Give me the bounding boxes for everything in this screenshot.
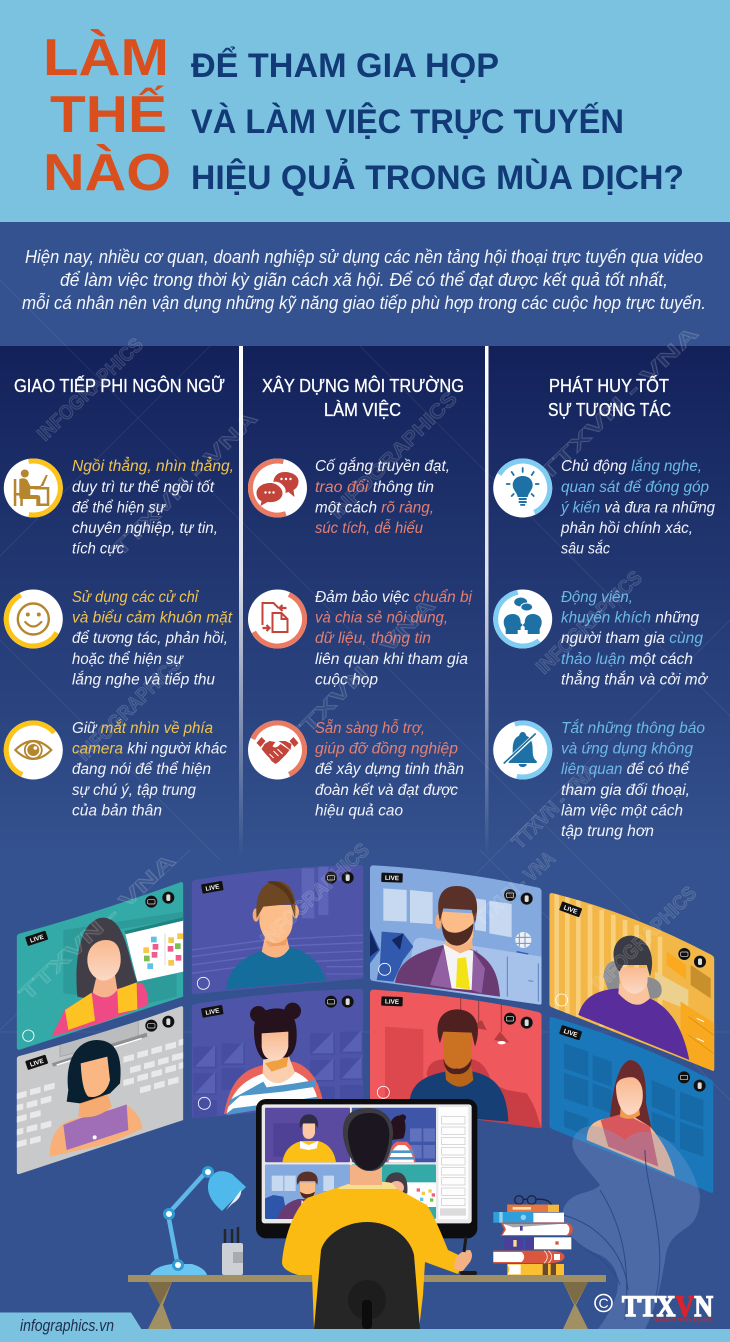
LIVE badge: LIVE (29, 1058, 45, 1069)
text block 1.1: chuyên nghiệp, tự tin, (72, 520, 218, 537)
text block 1.2: Sử dụng các cử chỉ (72, 589, 199, 606)
watermarks: TTXVN - VNA (508, 760, 601, 854)
text block 2.1: một cách rõ ràng, (315, 500, 434, 516)
intro text (22, 247, 706, 313)
text block 1.1: tích cực (72, 540, 124, 558)
text block 2.2: dữ liệu, thông tin (315, 630, 431, 647)
mini sidebar (438, 1107, 468, 1219)
mini screen purple (265, 1108, 350, 1162)
text block 2.2: và chia sẻ nội dung, (315, 610, 448, 626)
text block 3.3: Tắt những thông báo (561, 720, 705, 737)
website tag (0, 1312, 142, 1335)
text block 1.1: Ngồi thẳng, nhìn thẳng, (72, 457, 234, 475)
LIVE badge: LIVE (385, 998, 399, 1006)
hand and pen (454, 1250, 472, 1272)
text block 1.3: Giữ mắt nhìn về phía (72, 720, 213, 737)
text block 2.3 (315, 720, 464, 820)
watermarks: INFOGRAPHICS (73, 652, 186, 766)
text block 1.3: của bản thân (72, 802, 162, 820)
icon: chat bubbles (243, 454, 312, 522)
text block 2.3: hiệu quả cao (315, 802, 403, 820)
screen: teal woman (17, 882, 183, 1052)
text block 1.2 (72, 589, 233, 688)
LIVE badge (559, 901, 582, 917)
icon: person at desk (2, 457, 65, 519)
column 3: promoting interaction (485, 375, 715, 840)
TTXVN logo: C (598, 1295, 609, 1311)
text block 3.1: ý kiến và đưa ra những (560, 500, 715, 516)
bottom band (0, 1329, 730, 1342)
LIVE badge: LIVE (205, 1007, 220, 1017)
desk lamp (150, 1168, 246, 1275)
subtitle: VÀ LÀM VIỆC TRỰC TUYẾN (191, 103, 624, 141)
watermarks over screens: INFOGRAPHICS (588, 882, 701, 996)
text block 3.2: Động viên, (561, 589, 633, 606)
LIVE badge: LIVE (563, 904, 578, 916)
TTXVN logo: Vietnam News Agency (654, 1318, 714, 1324)
heading column 3 (548, 375, 671, 420)
watermarks (0, 280, 730, 1100)
text block 3.3: và ứng dụng không (561, 740, 693, 758)
intro text: để làm việc trong thời kỳ giãn cách xã hội. Để có thể đạt được kết quả tốt nhất, (60, 270, 668, 290)
text block 1.2: và biểu cảm khuôn mặt (72, 610, 233, 626)
text block 3.3: làm việc một cách (561, 802, 683, 820)
text block 3.1: sâu sắc (561, 540, 610, 558)
illustration: video call screens left (17, 865, 363, 1175)
watermarks: INFOGRAPHICS (33, 334, 148, 446)
title: LÀM THẾ NÀO: THẾ (50, 85, 167, 144)
column 2: building work environment (242, 375, 473, 820)
watermarks over screens (15, 839, 701, 1006)
text block 1.3: sự chú ý, tập trung (72, 782, 196, 799)
text block 3.1 (560, 458, 715, 558)
screen: person on yellow stripes (548, 892, 715, 1073)
column dividers (239, 346, 488, 856)
header band (0, 0, 730, 222)
screen: purple man (192, 865, 363, 997)
heading column 3: SỰ TƯƠNG TÁC (548, 400, 671, 420)
text block 3.2: khuyến khích những (561, 610, 699, 626)
heading column 1: GIAO TIẾP PHI NGÔN NGỮ (14, 375, 225, 396)
subtitle (191, 47, 684, 197)
text block 3.3: tập trung hơn (561, 823, 654, 840)
LIVE badge (25, 1055, 48, 1070)
text block 1.2: hoặc thể hiện sự (72, 651, 184, 668)
text block 1.1: để thể hiện sự (72, 500, 166, 516)
plant silhouette (562, 1126, 700, 1329)
heading column 2: LÀM VIỆC (324, 400, 401, 420)
watermarks over screens: TTXVN - VNA (471, 847, 560, 931)
title: LÀM THẾ NÀO: NÀO (43, 144, 171, 202)
text block 2.1: Cố gắng truyền đạt, (315, 458, 450, 475)
text block 2.3: Sẵn sàng hỗ trợ, (315, 720, 425, 737)
text block 2.1 (315, 458, 450, 537)
watermarks over screens: TTXVN - VNA (15, 850, 180, 1006)
text block 3.1: quan sát để đóng góp (561, 479, 709, 496)
controls (504, 889, 533, 905)
icon: light bulb (486, 451, 560, 525)
text block 3.1: phản hồi chính xác, (560, 520, 693, 537)
text block 3.2: thẳng thắn và cởi mở (561, 670, 709, 688)
text block 3.3: liên quan để có thể (561, 761, 690, 778)
controls (145, 1016, 174, 1032)
text block 2.2: liên quan khi tham gia (315, 651, 468, 668)
LIVE badge: LIVE (29, 934, 45, 945)
LIVE badge (25, 931, 48, 946)
title: LÀM THẾ NÀO: LÀM (43, 29, 169, 87)
text block 3.2 (561, 589, 709, 688)
controls (325, 996, 354, 1008)
LIVE badge: LIVE (385, 875, 399, 882)
screen: bearded man in suit (370, 865, 542, 1007)
columns panel background (0, 346, 730, 856)
mini screen light blue (265, 1164, 350, 1219)
screen: woman on blue (548, 1015, 715, 1195)
text block 2.3: đoàn kết và đạt được (315, 782, 458, 799)
illustration: video call screens right (370, 865, 715, 1195)
text block 2.3: để xây dựng tinh thần (315, 761, 464, 778)
heading column 2: XÂY DỰNG MÔI TRƯỜNG (262, 375, 464, 396)
icon: smiley (0, 582, 70, 656)
icon: two heads talking (485, 581, 561, 657)
text block 1.3: đang nói để thể hiện (72, 761, 211, 778)
text block 3.3: tham gia đối thoại, (561, 782, 690, 799)
controls (145, 892, 174, 908)
text block 3.3 (561, 720, 705, 840)
screen: man on red (370, 988, 542, 1130)
text block 2.2: cuộc họp (315, 672, 378, 688)
website tag: infographics.vn (20, 1316, 114, 1335)
LIVE badge (559, 1025, 582, 1040)
controls (678, 948, 706, 968)
text block 2.2: Đảm bảo việc chuẩn bị (315, 589, 473, 606)
text block 2.3: giúp đỡ đồng nghiệp (315, 740, 458, 758)
intro text: mỗi cá nhân nên vận dụng những kỹ năng giao tiếp phù hợp trong các cuộc họp trực tuyến. (22, 293, 706, 313)
subtitle: HIỆU QUẢ TRONG MÙA DỊCH? (191, 159, 684, 197)
text block 1.3: camera khi người khác (72, 740, 227, 758)
TTXVN logo: TTXVN (622, 1290, 713, 1323)
desk (128, 1275, 606, 1329)
text block 1.1 (72, 457, 234, 558)
icon: shared documents (242, 583, 313, 655)
watermarks: TTXVN - VNA (535, 323, 703, 486)
mini screen teal (352, 1164, 436, 1219)
text block 1.1: duy trì tư thế ngồi tốt (72, 479, 215, 496)
monitor (256, 1099, 477, 1238)
icon: handshake (242, 714, 313, 786)
text block 2.1: súc tích, dễ hiểu (315, 520, 423, 537)
icon: muted bell (489, 716, 556, 784)
text block 3.1: Chủ động lắng nghe, (561, 458, 702, 475)
LIVE badge: LIVE (205, 883, 220, 893)
text block 1.2: để tương tác, phản hồi, (72, 630, 228, 647)
text block 1.2: lắng nghe và tiếp thu (72, 672, 215, 688)
office chair (314, 1222, 420, 1329)
controls (325, 872, 354, 884)
mini screen blue (352, 1108, 436, 1162)
text block 1.3 (72, 720, 227, 820)
watermarks: INFOGRAPHICS (532, 567, 647, 679)
watermarks: TTXVN - VNA (283, 595, 440, 752)
watermarks: TTXVN - VNA (108, 407, 262, 562)
title: LÀM THẾ NÀO (43, 29, 171, 202)
subtitle: ĐỂ THAM GIA HỌP (191, 47, 499, 85)
text block 2.1: trao đổi thông tin (315, 479, 434, 496)
LIVE badge (381, 996, 403, 1006)
watermarks over screens: INFOGRAPHICS (256, 839, 374, 951)
text block 3.2: người tham gia cùng (561, 630, 703, 647)
column 1: non-verbal communication (0, 375, 234, 820)
heading column 3: PHÁT HUY TỐT (549, 375, 669, 396)
LIVE badge (201, 1005, 224, 1018)
LIVE badge (381, 873, 403, 883)
LIVE badge: LIVE (563, 1028, 578, 1039)
controls (678, 1071, 706, 1092)
text block 2.2 (315, 589, 473, 688)
screen: gray woman (17, 1005, 183, 1175)
screen: purple woman with buns (192, 988, 363, 1120)
LIVE badge (201, 881, 224, 894)
icon: eye (0, 714, 69, 786)
pen cup (222, 1227, 243, 1275)
watermarks: INFOGRAPHICS (326, 388, 462, 524)
heading column 2 (262, 375, 464, 420)
book stack and glasses (493, 1196, 573, 1275)
controls (504, 1013, 533, 1029)
person seen from behind (282, 1108, 477, 1329)
text block 3.2: thảo luận một cách (561, 651, 693, 668)
